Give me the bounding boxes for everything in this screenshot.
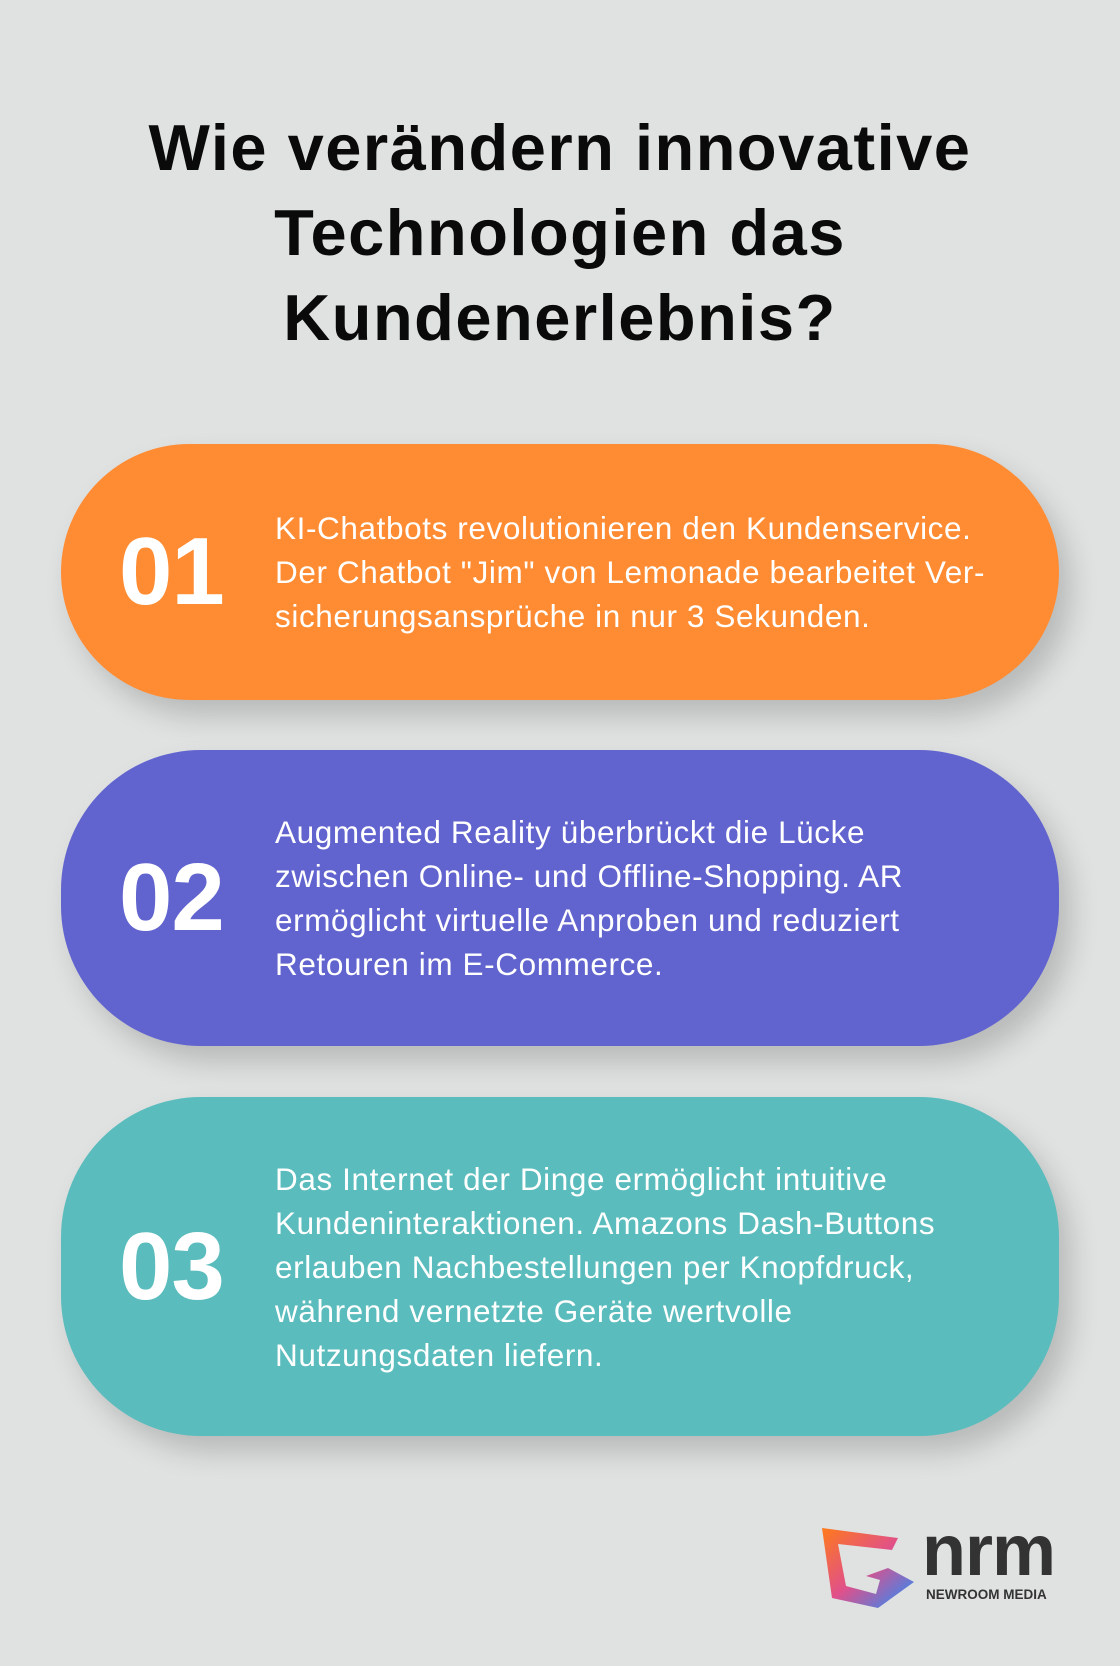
title: Wie verändern innovative (149, 111, 971, 184)
text 3: Kundeninteraktionen. Amazons Dash-Buttons (275, 1204, 935, 1240)
text 1: sicherungsansprüche in nur 3 Sekunden. (275, 598, 870, 634)
text 3: während vernetzte Geräte wertvolle (275, 1292, 793, 1328)
title: Technologien das (274, 196, 846, 269)
logo icon (822, 1528, 914, 1608)
text 1 (275, 510, 985, 634)
text 2: Augmented Reality überbrückt die Lücke (275, 814, 865, 850)
card 3 (61, 1097, 1059, 1436)
text 2 (275, 814, 903, 982)
text 1: Der Chatbot "Jim" von Lemonade bearbeitet Ver- (275, 554, 985, 590)
logo: NEWROOM MEDIA (926, 1587, 1047, 1602)
text 3: Das Internet der Dinge ermöglicht intuitive (275, 1160, 887, 1196)
logo (822, 1511, 1055, 1608)
text 3: erlauben Nachbestellungen per Knopfdruck, (275, 1248, 914, 1284)
number 03: 03 (119, 1212, 224, 1320)
text 2: ermöglicht virtuelle Anproben und reduziert (275, 902, 900, 938)
logo text: nrm (922, 1511, 1055, 1591)
number 01: 01 (119, 518, 224, 625)
title: Kundenerlebnis? (283, 281, 837, 354)
title (148, 111, 971, 354)
text 3: Nutzungsdaten liefern. (275, 1336, 603, 1372)
text 3 (275, 1160, 935, 1372)
text 1: KI-Chatbots revolutionieren den Kundenservice. (275, 510, 972, 546)
text 2: Retouren im E-Commerce. (275, 946, 663, 982)
number 02: 02 (119, 844, 224, 951)
card 2 (61, 750, 1059, 1046)
text 2: zwischen Online- und Offline-Shopping. AR (275, 858, 903, 894)
card 1 (61, 444, 1059, 700)
